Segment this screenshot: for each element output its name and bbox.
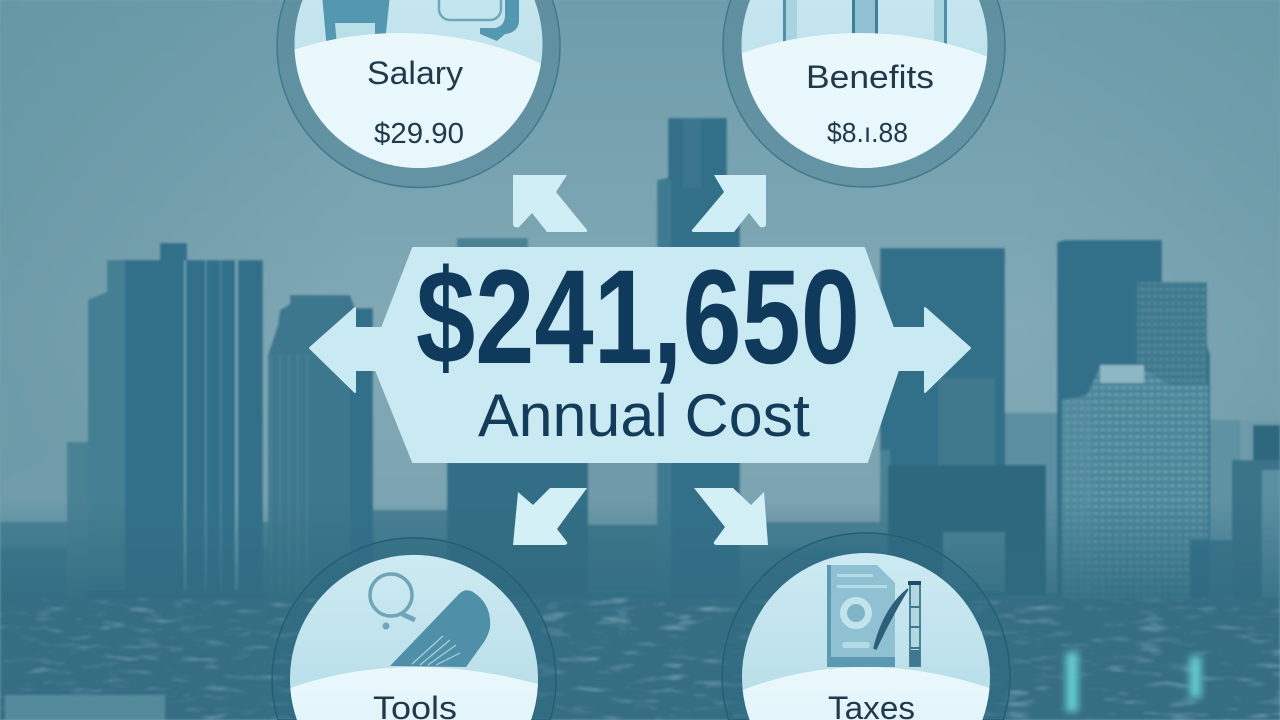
lower panel: [742, 33, 987, 168]
lower panel: [743, 667, 990, 720]
lower panel: [294, 33, 541, 168]
value: salary: $29.90: [374, 118, 464, 150]
left tower: [67, 442, 91, 600]
label: Salary: Salary: [367, 55, 463, 91]
arrow: down-left to Tools: [513, 488, 587, 545]
icon: tax document: [827, 565, 895, 667]
value: benefits: $8.ı.88: [827, 117, 908, 148]
label: Benefits: Benefits: [806, 59, 934, 95]
icon: tool blade: [390, 590, 490, 667]
headline figure: $241,650: [416, 243, 860, 392]
arrow: up-right to Benefits: [692, 175, 766, 232]
subtitle: Annual Cost: [478, 382, 810, 449]
icon: benefit columns: [783, 0, 947, 45]
card: Tools: [272, 538, 556, 720]
card: Taxes: [722, 533, 1010, 720]
card: Salary: [276, 0, 561, 188]
lower panel: [290, 667, 538, 720]
arrow: down-right to Taxes: [694, 488, 768, 545]
second tower: [268, 295, 373, 590]
icon: pen and ladder: [874, 581, 921, 666]
haze at building bases: [0, 500, 1280, 610]
glowing light streaks: [1066, 652, 1201, 712]
right cluster: [880, 248, 1005, 498]
icon: magnifier: [370, 574, 415, 630]
icon: salary figure and speech bubble: [322, 0, 519, 41]
ground: [0, 598, 1280, 720]
arrow: up-left to Salary: [513, 175, 587, 232]
central banner with side arrows: [310, 243, 970, 462]
centre tower: [657, 118, 740, 610]
card: Benefits: [722, 0, 1006, 188]
far buildings: [1005, 413, 1057, 593]
